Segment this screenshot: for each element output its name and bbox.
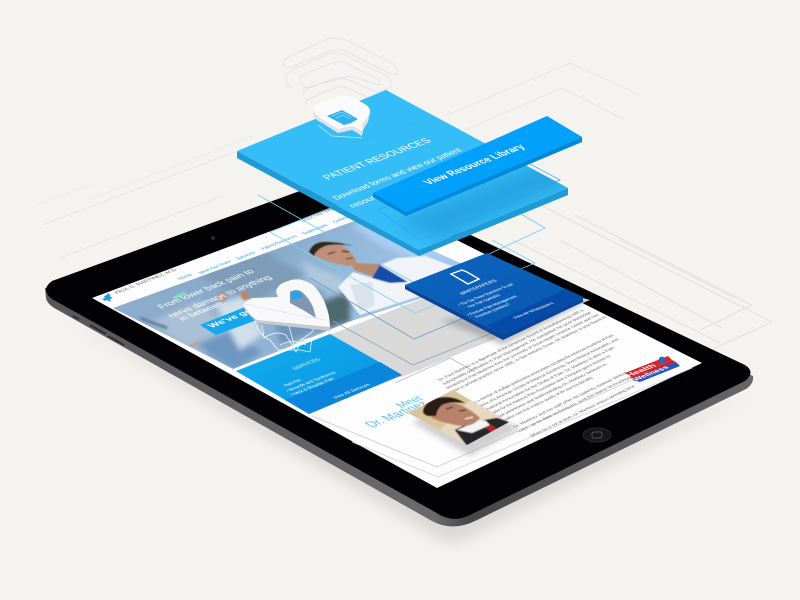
body copy about the doctor: care, up-to-date techniques, and the latest technology. [517,375,633,432]
navigation: Testimonials [301,223,330,236]
button shadow on card [402,166,566,241]
doctor neck [350,263,383,276]
heart side [243,305,330,331]
whitepapers card: Procedure Questions? [474,303,512,319]
tablet [45,175,753,526]
portrait face [428,403,480,426]
heart highlight blue [291,291,303,300]
body copy about the doctor [437,308,637,437]
health and wellness logo: Health [625,363,659,378]
whitepapers face [405,253,583,335]
hero headline: in between... [176,298,234,322]
whitepapers card: Your Pain Specialist [466,293,503,309]
nav cross logo [102,293,113,302]
view resource library button [373,116,582,216]
navigation: Home [177,273,195,281]
navigation: Patient Resources [260,234,300,251]
home button [583,428,611,442]
patient resources card [237,90,575,256]
body copy about the doctor: Dr. Martinez and his staff offer his patients superior clinical [512,371,628,428]
blurred hospital corridor [152,222,448,369]
card side thickness [237,151,568,256]
doctor face [310,244,357,266]
body copy about the doctor: He is a member of multiple professional associations including the American Academy of Pain [467,333,615,406]
logo under outlines [318,120,362,138]
card inner outlines [328,120,560,240]
whitepapers card: • The Top Three Questions To ask [457,282,516,307]
meet heading: Dr. Martinez [361,399,432,429]
doctor scrubs [372,265,408,283]
body copy about the doctor: Dr. Paul Martinez is a diplomate of the American Board of Anesthesiology with a [437,308,585,381]
logo hole [327,110,358,125]
services panel: View All Services [332,383,373,400]
doctor coat [338,256,454,316]
services panel: • Wounds and Syndromes [285,371,339,393]
heart body [243,279,330,327]
portrait shadow [412,400,520,456]
card description line one: Download forms and view our patient [330,147,465,201]
white 3D speech bubble logo [313,95,370,138]
front camera [211,236,215,240]
body copy about the doctor: subspecialty certification in Pain Management. He completed his post-doctorate [441,311,593,385]
services panel: SERVICES [292,358,323,371]
portrait suit [455,418,512,447]
health and wellness logo: Wellness [632,365,671,382]
body copy about the doctor: International Association for the Study of Pain. Dr. Martinez is also a Pain [477,346,616,414]
whitepapers card [405,253,590,345]
button label: View Resource Library [421,143,529,186]
hero button: We've got [205,306,258,329]
tablet black bezel [46,175,750,519]
doctor hair [309,242,352,256]
tablet metal edge [45,250,753,526]
doctor portrait photo [408,390,520,458]
card face [237,90,568,250]
body copy about the doctor: conservative care that restores quality of life and functionality. [492,376,595,426]
body copy about the doctor: been in private practice since 1995, in San Antonio Texas. Dr. Martinez is also fluent in [449,315,608,393]
logo side shading [313,108,370,136]
services panel: • Neck & Shoulder Pain [289,377,337,397]
card description line two: resources [346,189,392,209]
body copy about the doctor: Medicine, the American Society of Regional Anesthesia, Texas Medical Association, and [472,337,620,410]
body copy about the doctor: When he is not at work, Dr. Martinez enjoys spending time [529,384,637,437]
services footer band [285,362,402,414]
whitepapers shadow [440,300,590,345]
heart opening [290,290,316,318]
doctor eyes [328,251,349,254]
whitepapers card: WHITEPAPERS [459,279,499,296]
health and wellness logo [625,356,680,382]
ghost logo outlines floating above card [283,38,397,110]
document icon [451,270,479,284]
doctor in hero [308,241,454,316]
card heading: PATIENT RESOURCES [320,137,435,181]
portrait hair [423,397,465,416]
side buttons [73,316,124,345]
doctor mouth [346,258,353,259]
navigation: PAUL G. MARTINEZ, M.D. [114,267,181,295]
portrait image [408,390,509,445]
isometric tablet illustration [35,38,772,546]
white heart outline stack [255,320,316,352]
navigation: (210) 546-1440 [300,207,338,223]
nurse head [218,292,226,302]
hero headline: From lower back pain to [155,268,258,310]
hero photo [113,221,461,370]
whitepapers card: View All Whitepapers [512,301,556,320]
portrait features [446,407,466,411]
orange streak [188,340,200,348]
button face [373,116,582,212]
gray content section [235,272,590,377]
hero headline: nerve damage to anything [165,274,275,319]
meet heading: Meet [393,395,426,409]
coat shading [350,282,375,312]
logo hole outlines [332,112,352,119]
cyan and blue-gray wireframe planes over tablet [258,135,692,477]
screen [92,195,702,488]
logo body [313,95,370,131]
navigation: Contact [332,216,350,224]
portrait shirt and tie [457,420,490,433]
whitepapers footer band [486,289,583,335]
body copy about the doctor: fellowship in Pain Medicine from the University of Texas Health Science Center and has [445,313,601,389]
body copy about the doctor: increase awareness and understanding. Dr. Martinez believes in [487,363,608,422]
body copy about the doctor: Specialist for the National Pain Foundation and a frequent guest lecturer to [482,354,612,418]
button side thickness [373,137,582,216]
background wireframe planes [35,63,772,355]
tablet shadow [60,315,755,543]
services panel: • Back Pain [282,378,304,388]
services panel [233,331,402,414]
navigation [102,207,350,302]
green exit sign [172,292,187,299]
whitepapers side [405,285,583,340]
3D white heart icon [243,279,330,331]
navigation: Services [235,251,258,261]
dark shelf [140,317,168,329]
whitepapers card: • Forever Pain Management [466,295,520,317]
navigation: Meet Our Team [198,260,233,275]
hero button [200,305,262,335]
